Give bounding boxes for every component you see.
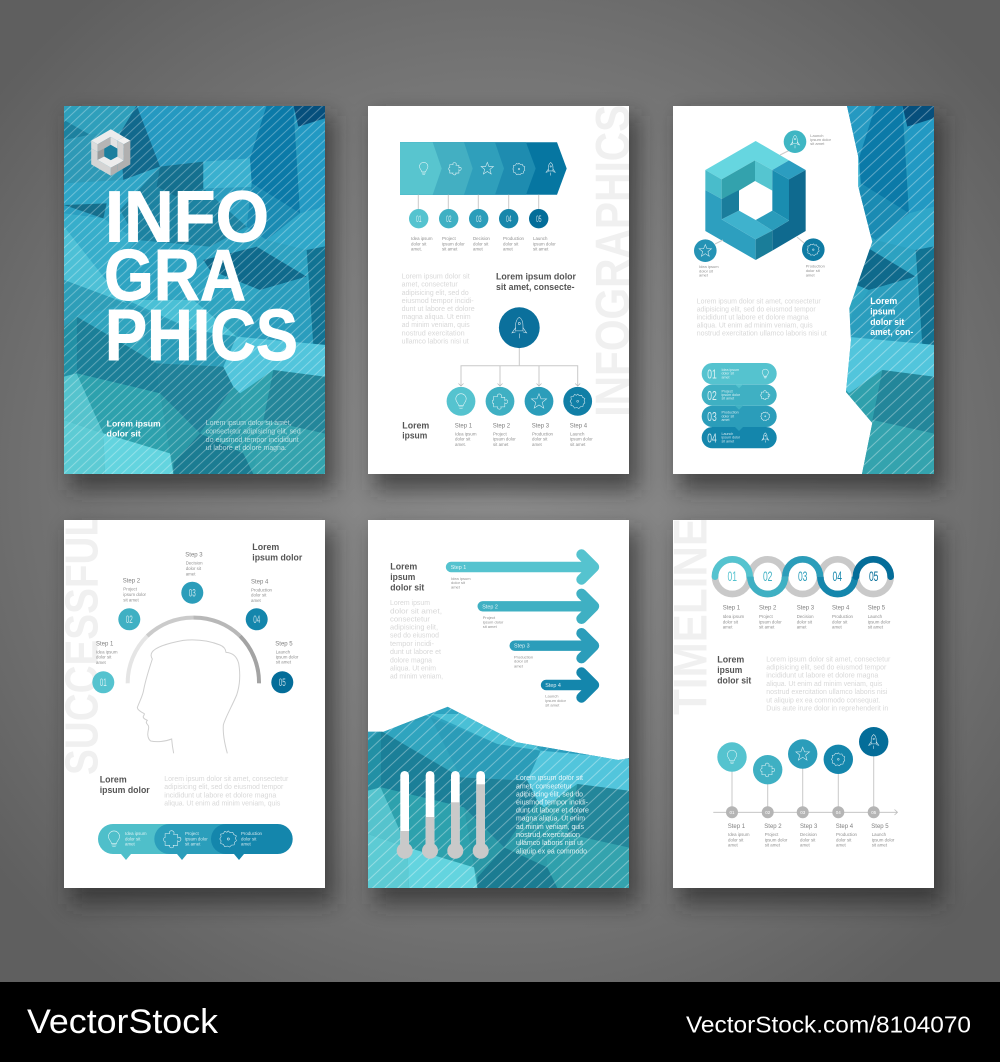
text block	[390, 600, 443, 680]
callouts around hexagon: amet	[699, 273, 709, 278]
ring numbers: 02	[763, 569, 772, 584]
timeline step labels: dolor sit	[836, 837, 852, 842]
timeline step labels: Step 1	[728, 824, 746, 830]
text block: aliqua. Ut enim ad minim veniam, quis	[697, 322, 813, 329]
stacked numbered pills: Launch	[722, 432, 733, 436]
stacked numbered pills: Idea ipsum	[722, 368, 739, 372]
footer URL: VectorStock.com/8104070	[686, 1012, 971, 1038]
text block	[766, 656, 891, 712]
callouts around hexagon: Production	[806, 264, 825, 269]
timeline step labels: Decision	[800, 832, 817, 837]
ring step labels: ipsum dolor	[868, 619, 891, 624]
step labels: ipsum dolor	[570, 437, 593, 442]
text block: aliqua. Ut enim ad minim veniam, quis	[164, 801, 281, 808]
numbered steps 01-05	[409, 195, 556, 252]
heading	[390, 562, 425, 594]
callouts around hexagon: dolor sit	[806, 268, 821, 273]
text block: sed do eiusmod	[390, 633, 439, 640]
text block: Lorem ipsum	[390, 600, 430, 607]
ring numbers	[728, 569, 878, 584]
timeline step labels: ipsum dolor	[765, 837, 788, 842]
step labels: Project	[493, 431, 507, 436]
step labels: Step 1	[455, 423, 473, 429]
step labels: Project	[123, 586, 138, 591]
numbered steps 01-05: dolor sit	[411, 241, 427, 246]
timeline step labels: Project	[765, 832, 779, 837]
ring step labels: Idea ipsum	[723, 614, 745, 619]
step labels: Launch	[276, 649, 291, 654]
text block: Lorem ipsum dolor sit amet, consectetur	[164, 776, 289, 783]
text block: adipisicing elit, sed do	[402, 290, 469, 297]
step labels: dolor sit	[532, 437, 548, 442]
ring step labels: Step 3	[797, 606, 815, 612]
stacked numbered pills: 02	[707, 388, 717, 403]
heading bottom: ipsum dolor	[100, 785, 150, 796]
page shadows	[70, 116, 943, 904]
cover subtitle	[107, 419, 161, 439]
step labels: Production	[532, 431, 554, 436]
side band text: Lorem	[870, 296, 897, 306]
text block: Lorem ipsum dolor sit amet, consectetur	[766, 656, 891, 663]
pin timeline: 01	[729, 810, 735, 815]
panel: head arc page	[55, 513, 325, 888]
ring step labels: amet	[832, 625, 843, 630]
step arrows: dolor sit	[451, 580, 466, 585]
step labels: Step 4	[570, 423, 588, 429]
white text block: adipisicing elit, sed do	[516, 791, 583, 798]
heading	[496, 271, 576, 293]
heading: Lorem	[390, 562, 417, 573]
segmented pill callout	[98, 824, 293, 860]
arc over head	[128, 618, 259, 683]
ring numbers: 03	[798, 569, 807, 584]
timeline step labels: amet	[836, 843, 847, 848]
ring step labels: amet	[723, 625, 733, 630]
text block: ad minim veniam, quis	[402, 322, 470, 329]
numbered step circles: 05	[279, 677, 286, 689]
step labels: ipsum dolor	[493, 437, 516, 442]
timeline step labels: amet	[800, 843, 811, 848]
step labels: dolor sit	[251, 593, 267, 598]
step labels: amet	[532, 442, 543, 447]
numbered steps 01-05: amet.	[411, 247, 422, 252]
footer bar	[0, 982, 1000, 1062]
step labels: Step 1	[96, 641, 114, 647]
numbered steps 01-05: 03	[476, 214, 481, 224]
step arrows: amet	[514, 663, 524, 668]
step labels: Production	[251, 587, 273, 592]
heading top: ipsum dolor	[252, 552, 303, 563]
isometric hexagon diagram	[705, 141, 806, 260]
stacked numbered pills: dolor sit	[722, 414, 734, 418]
stacked numbered pills	[702, 363, 777, 448]
white text block: magna aliqua. Ut enim	[516, 816, 585, 823]
ring step labels: Production	[832, 614, 854, 619]
heading: dolor sit	[717, 676, 752, 687]
panel: cover page	[64, 105, 331, 474]
white text block: ad minim veniam, quis	[516, 824, 584, 831]
step arrows: Step 2	[482, 604, 498, 610]
cover subtitle: Lorem ipsum	[107, 419, 161, 429]
numbered steps 01-05: ipsum dolor	[442, 241, 465, 246]
segmented pill callout: sit amet	[185, 842, 201, 847]
title	[104, 178, 298, 376]
ring step labels: amet	[797, 625, 807, 630]
side band text	[870, 296, 913, 337]
text block: adipisicing elit, sed do eiusmod tempor	[766, 665, 887, 672]
step labels: Step 2	[123, 578, 141, 584]
timeline step labels: Launch	[872, 832, 887, 837]
ring numbers: 04	[833, 569, 842, 584]
numbered step circles: 01	[100, 677, 107, 689]
chevron process arrow	[400, 142, 567, 195]
step labels: Decision	[186, 561, 203, 566]
timeline step labels: sit amet	[765, 843, 781, 848]
segmented pill callout: Project	[185, 831, 199, 836]
text block: adipisicing elit, sed do eiusmod tempor	[697, 306, 816, 313]
step labels: ipsum dolor	[123, 592, 147, 597]
white text block	[516, 775, 589, 855]
text block: ullamco laboris nisi ut	[402, 339, 469, 346]
panel: timeline page	[664, 518, 934, 888]
step labels: Step 3	[532, 423, 550, 429]
timeline step labels: sit amet	[872, 843, 888, 848]
text block: aliqua. Ut enim	[390, 665, 436, 672]
heading: sit amet, consecte-	[496, 282, 574, 293]
text block	[164, 776, 289, 808]
stacked numbered pills: ipsum dolor	[722, 393, 741, 397]
text block: aliqua. Ut enim ad minim veniam, quis	[766, 681, 883, 688]
timeline step labels: Step 2	[764, 824, 782, 830]
timeline step labels	[728, 824, 895, 848]
ring step labels: Project	[759, 614, 773, 619]
vertical watermark TIMELINE: TIMELINE	[664, 518, 717, 715]
title: PHICS	[105, 296, 298, 376]
footer logo: VectorStock	[27, 1003, 219, 1041]
ring numbers: 05	[869, 569, 878, 584]
pin timeline: 04	[836, 810, 841, 815]
section heading	[402, 420, 429, 442]
step labels: amet.	[455, 442, 466, 447]
numbered steps 01-05: 02	[446, 214, 451, 224]
heading top: Lorem	[252, 542, 279, 553]
step labels: Idea ipsum	[455, 431, 477, 436]
numbered steps 01-05: amet	[503, 247, 514, 252]
segmented pill callout: Production	[241, 831, 263, 836]
white text block: ullamco laboris nisi ut	[516, 840, 583, 847]
text block: dunt ut labore et dolore	[402, 306, 475, 313]
stacked numbered pills: 03	[707, 409, 717, 424]
step arrows: Launch	[545, 694, 558, 699]
timeline step labels: Step 5	[871, 824, 889, 830]
cover text block: do eiusmod tempor incididunt	[206, 437, 299, 444]
step arrows: Step 1	[451, 565, 466, 571]
callouts around hexagon	[694, 130, 832, 278]
step labels	[96, 553, 299, 665]
numbered steps 01-05: Idea ipsum	[411, 236, 433, 241]
step arrows: Step 4	[545, 683, 561, 689]
text block: Duis aute irure dolor in reprehenderit in	[766, 705, 888, 712]
step arrows: Production	[514, 654, 533, 659]
panel: arrows and thermometers page	[368, 519, 635, 888]
text block: incididunt ut labore et dolore magna	[164, 792, 276, 799]
step labels: Idea ipsum	[96, 649, 118, 654]
stacked numbered pills: sit amet	[722, 397, 734, 401]
step arrows: ipsum dolor	[483, 619, 504, 624]
numbered steps 01-05: Decision	[473, 236, 490, 241]
cover text block: ut labore et dolore magna.	[206, 445, 287, 452]
head profile outline	[137, 640, 240, 753]
heading bottom: Lorem	[100, 775, 127, 786]
text block: Lorem ipsum dolor sit	[402, 274, 470, 280]
ring step labels: sit amet	[868, 625, 884, 630]
step arrows	[451, 554, 594, 708]
numbered steps 01-05: Project	[442, 236, 456, 241]
numbered steps 01-05: sit amet	[442, 247, 458, 252]
text block: dunt ut labore et	[390, 649, 441, 656]
callouts around hexagon: Launch	[810, 133, 823, 138]
step arrows: dolor sit	[514, 659, 529, 664]
heading bottom	[100, 775, 150, 796]
step labels: ipsum dolor	[276, 655, 299, 660]
text block: nostrud exercitation ullamco laboris nisi ut	[697, 331, 827, 338]
icon: white isometric logo	[91, 129, 130, 176]
timeline step labels: dolor sit	[800, 837, 816, 842]
stacked numbered pills: 04	[707, 430, 717, 446]
polygon lower band	[368, 706, 629, 888]
numbered steps 01-05: sit amet	[533, 247, 549, 252]
segmented pill callout: dolor sit	[125, 836, 141, 841]
ring step labels: Decision	[797, 614, 814, 619]
ring step labels: dolor sit	[797, 619, 813, 624]
white text block: Lorem ipsum dolor sit	[516, 775, 583, 782]
tree diagram	[447, 307, 592, 416]
timeline step labels: amet	[728, 843, 739, 848]
text block	[697, 298, 827, 338]
polygon side band	[846, 106, 934, 474]
step labels: dolor sit	[186, 566, 202, 571]
text block: incididunt ut labore et dolore magna	[766, 673, 878, 680]
cover text block: Lorem ipsum dolor sit amet,	[206, 420, 292, 427]
heading: Lorem ipsum dolor	[496, 271, 576, 282]
step arrows: amet	[451, 584, 461, 589]
numbered step circles	[92, 582, 293, 693]
text block: ad minim veniam,	[390, 673, 443, 680]
step labels: sit amet	[123, 597, 139, 602]
section heading: ipsum	[402, 431, 427, 442]
text block: eiusmod tempor incidi-	[402, 298, 474, 305]
panel: hexagon page	[673, 105, 940, 474]
cover subtitle: dolor sit	[107, 429, 141, 439]
segmented pill callout: Idea ipsum	[125, 831, 147, 836]
vertical watermark SUCCESSFUL: SUCCESSFUL	[55, 513, 107, 775]
step labels: Step 4	[251, 579, 269, 585]
heading top	[252, 542, 303, 563]
heading	[717, 655, 752, 687]
heading: ipsum	[717, 665, 742, 676]
heading: ipsum	[390, 572, 415, 583]
timeline step labels: Step 3	[800, 824, 818, 830]
stacked numbered pills: Production	[722, 411, 739, 415]
step labels: amet	[96, 660, 107, 665]
stacked numbered pills: sit amet	[722, 439, 734, 443]
ring step labels: Step 2	[759, 606, 777, 612]
heading: dolor sit	[390, 583, 425, 594]
pin timeline: 02	[765, 810, 771, 815]
callouts around hexagon: Idea ipsum	[699, 264, 719, 269]
numbered steps 01-05: amet	[473, 247, 484, 252]
ring numbers: 01	[728, 569, 737, 584]
step arrows: sit amet	[545, 703, 560, 708]
stacked numbered pills: ipsum dolor	[722, 436, 741, 440]
step arrows: sit amet	[483, 624, 498, 629]
timeline step labels: dolor sit	[728, 837, 744, 842]
white text block: dunt ut labore et dolore	[516, 808, 589, 815]
step labels	[455, 423, 593, 447]
timeline step labels: Step 4	[836, 824, 854, 830]
ring step labels: ipsum dolor	[759, 619, 782, 624]
white text block: amet, consectetur	[516, 783, 573, 790]
white text block: nostrud exercitation	[516, 832, 580, 839]
text block	[402, 274, 475, 346]
text block: nostrud exercitation	[402, 330, 465, 337]
timeline step labels: Production	[836, 832, 858, 837]
numbered steps 01-05: dolor sit	[473, 241, 489, 246]
step labels: sit amet	[493, 442, 509, 447]
numbered steps 01-05: 04	[506, 214, 511, 224]
numbered steps 01-05: 01	[416, 214, 421, 224]
callouts around hexagon: sit amet	[810, 141, 825, 146]
stacked numbered pills: amet	[722, 375, 730, 379]
numbered step circles: 04	[253, 614, 260, 626]
text block: nostrud exercitation ullamco laboris nisi	[766, 689, 888, 696]
numbered step circles: 02	[126, 614, 133, 626]
timeline step labels: Idea ipsum	[728, 832, 750, 837]
numbered step circles: 03	[189, 588, 196, 600]
white text block: eiusmod tempor incidi-	[516, 800, 589, 807]
numbered steps 01-05: Production	[503, 236, 525, 241]
white text block: aliquip ex ea commodo	[516, 848, 587, 855]
numbered steps 01-05: ipsum dolor	[533, 241, 556, 246]
segmented pill callout: ipsum dolor	[185, 836, 208, 841]
side band text: ipsum	[870, 307, 895, 317]
callouts around hexagon: ipsum dolor	[810, 137, 832, 142]
pin timeline: 05	[871, 810, 877, 815]
vertical watermark INFOGRAPHICS: INFOGRAPHICS	[587, 105, 640, 417]
step labels: sit amet	[276, 660, 292, 665]
step arrows: Project	[483, 615, 496, 620]
segmented pill callout: amet	[241, 842, 252, 847]
text block: amet, consectetur	[402, 282, 458, 289]
text block: incididunt ut labore et dolore magna	[697, 314, 809, 321]
segmented pill callout: amet	[125, 842, 136, 847]
thermometer gauges	[397, 771, 489, 859]
stacked numbered pills: dolor sit	[722, 372, 734, 376]
ring step labels	[723, 606, 891, 630]
numbered steps 01-05: 05	[536, 214, 541, 224]
title: GRA	[104, 236, 246, 316]
side band text: dolor sit	[870, 317, 904, 327]
step arrows: Step 3	[514, 644, 530, 650]
side band text: amet, con-	[870, 327, 913, 337]
step labels: dolor sit	[455, 437, 471, 442]
numbered steps 01-05: dolor sit	[503, 241, 519, 246]
ring step labels: Step 1	[723, 606, 741, 612]
title: INFO	[105, 178, 269, 258]
text block: adipisicing elit, sed do eiusmod tempor	[164, 784, 284, 791]
text block: dolore magna	[390, 657, 432, 664]
step arrows: Idea ipsum	[451, 576, 471, 581]
segmented pill callout: dolor sit	[241, 836, 257, 841]
stacked numbered pills: Project	[722, 389, 733, 393]
step labels: amet	[186, 571, 196, 576]
ring step labels: Step 4	[832, 606, 850, 612]
panel: process arrow and tree page	[368, 105, 640, 474]
step labels: Step 3	[185, 553, 203, 559]
cover text block: consectetur adipisicing elit, sed	[206, 429, 301, 436]
numbered steps 01-05: Launch	[533, 236, 548, 241]
step arrows: ipsum dolor	[545, 698, 567, 703]
pin timeline	[713, 727, 898, 818]
ring step labels: dolor sit	[723, 619, 739, 624]
timeline step labels: ipsum dolor	[872, 837, 895, 842]
callouts around hexagon: amet	[806, 272, 815, 277]
text block: consectetur	[390, 616, 431, 623]
ring step labels: Step 5	[868, 606, 886, 612]
pin timeline: 03	[800, 810, 806, 815]
linked rings 01-05	[715, 559, 891, 594]
callouts around hexagon: dolor sit	[699, 268, 714, 273]
text block: adipisicing elit,	[390, 624, 438, 631]
step labels: Step 5	[275, 641, 293, 647]
step labels: sit amet	[570, 442, 586, 447]
section heading: Lorem	[402, 420, 429, 431]
heading: Lorem	[717, 655, 744, 666]
text block: magna aliqua. Ut enim	[402, 314, 471, 321]
ring step labels: Launch	[868, 614, 883, 619]
step labels: amet	[251, 598, 262, 603]
text block: ut aliquip ex ea commodo consequat.	[766, 697, 880, 704]
text block: dolor sit amet,	[390, 608, 442, 615]
text block: Lorem ipsum dolor sit amet, consectetur	[697, 298, 821, 305]
ring step labels: sit amet	[759, 625, 775, 630]
step labels: dolor sit	[96, 655, 112, 660]
step labels: Step 2	[493, 423, 511, 429]
stacked numbered pills: amet	[722, 418, 730, 422]
ring step labels: dolor sit	[832, 619, 848, 624]
step labels: Launch	[570, 431, 585, 436]
text block: tempor incidi-	[390, 641, 435, 648]
cover text block	[206, 420, 301, 452]
stacked numbered pills: 01	[707, 367, 717, 382]
